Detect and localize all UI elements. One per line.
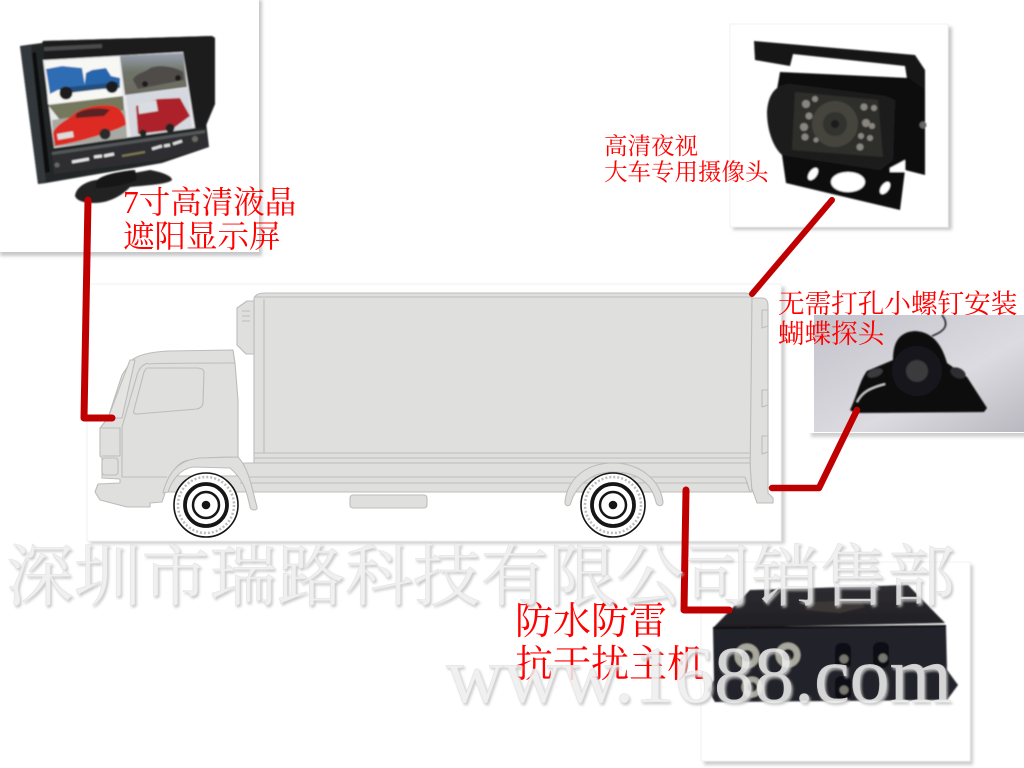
monitor screen	[43, 52, 195, 148]
label: host unit: 抗干扰主机	[515, 644, 705, 686]
illustration: truck side view	[95, 293, 773, 510]
panel: butterfly sensor photo card	[808, 308, 1024, 437]
truck: rear fender	[565, 463, 663, 506]
truck: front fender	[163, 457, 257, 510]
label: butterfly probe: 蝴蝶探头	[778, 319, 885, 349]
connector: sensor to truck rear	[772, 410, 857, 488]
panel: host unit photo card	[701, 562, 973, 765]
truck: cargo box	[237, 293, 773, 503]
icon: rear-view night vision camera	[754, 41, 926, 210]
label: host unit: 防水防雷	[515, 601, 667, 643]
icon: waterproof host box	[708, 585, 958, 702]
label: monitor: 遮阳显示屏	[123, 219, 281, 254]
truck: side box	[350, 495, 427, 508]
label: camera: 大车专用摄像头	[604, 159, 769, 186]
label: monitor: 7寸高清液晶	[123, 185, 296, 220]
label: monitor	[123, 185, 296, 254]
watermark: website: www.1688.com	[446, 632, 952, 720]
label: camera: 高清夜视	[604, 133, 698, 160]
watermark: company name: 深圳市瑞路科技有限公司销售部	[6, 540, 955, 615]
connector: camera to cargo box	[752, 200, 832, 294]
label: host unit	[515, 601, 705, 686]
connector: monitor to cab	[84, 200, 112, 418]
truck: cab	[95, 350, 238, 507]
label: camera	[604, 133, 769, 186]
label: butterfly probe: 无需打孔小螺钉安装	[778, 289, 1017, 319]
label: butterfly probe	[778, 289, 1017, 349]
icon: butterfly probe sensor	[850, 315, 987, 413]
panel: truck card	[87, 284, 785, 544]
icon: 7-inch sun-shade monitor	[20, 36, 215, 203]
truck: rear wheel	[581, 473, 645, 537]
panel: camera photo card	[730, 24, 952, 230]
connector: chassis to host unit	[684, 490, 729, 610]
truck: front wheel	[174, 473, 238, 537]
truck: chassis rail	[162, 463, 752, 492]
panel: monitor photo card	[0, 0, 262, 256]
